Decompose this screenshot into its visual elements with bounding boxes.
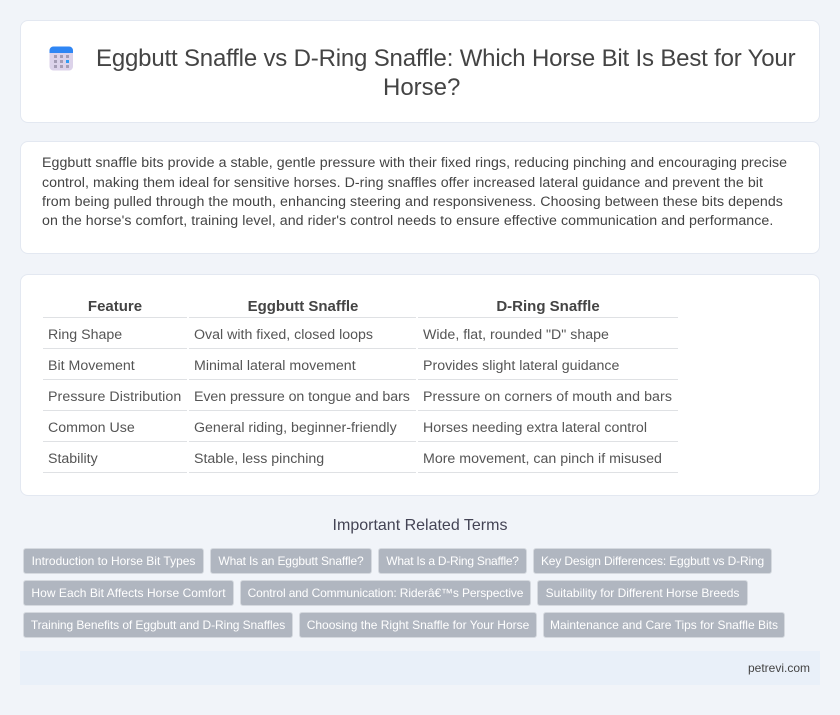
row: bit movement: Provides slight lateral guidance — [423, 358, 619, 374]
row: ring shape: Ring Shape — [48, 327, 122, 343]
tag: Key Design Differences: Eggbutt vs D-Ring — [541, 554, 764, 568]
row: bit movement — [48, 358, 619, 374]
row: ring shape: Wide, flat, rounded "D" shape — [423, 327, 609, 343]
text block: introduction: control, making them ideal for sensitive horses. D-ring snaffles offer increased lateral guidance and prevent the bit — [42, 175, 763, 191]
tag — [537, 580, 748, 606]
row: common use: General riding, beginner-friendly — [194, 420, 397, 436]
tag — [378, 548, 527, 574]
text block: introduction — [42, 155, 787, 229]
tag — [543, 612, 785, 638]
row: pressure distribution — [48, 389, 672, 405]
row: stability: Stable, less pinching — [194, 451, 324, 467]
tag — [240, 580, 531, 606]
tag: Suitability for Different Horse Breeds — [546, 586, 739, 600]
row: bit movement: Bit Movement — [48, 358, 135, 374]
row: pressure distribution: Even pressure on tongue and bars — [194, 389, 410, 405]
text block: introduction: from being pulled through the mouth, enhancing steering and responsiveness. Choosing between these bits depends — [42, 194, 783, 210]
tag: How Each Bit Affects Horse Comfort — [31, 586, 226, 600]
panel: introduction — [20, 141, 820, 254]
row: ring shape — [48, 327, 609, 343]
tag: Maintenance and Care Tips for Snaffle Bits — [550, 618, 778, 632]
text block: introduction: on the horse's comfort, training level, and rider's control needs to ensure effective communication and performance. — [42, 213, 773, 229]
text block: introduction: Eggbutt snaffle bits provide a stable, gentle pressure with their fixed rings, reducing pinching and encouraging precise — [42, 155, 787, 171]
table header row: Eggbutt Snaffle — [248, 298, 358, 315]
title: Eggbutt Snaffle vs D-Ring Snaffle: Which Horse Bit Is Best for Your — [96, 45, 795, 72]
panel: comparison table — [20, 274, 820, 496]
table header row — [88, 298, 600, 315]
row: common use — [48, 420, 647, 436]
row: common use: Horses needing extra lateral control — [423, 420, 647, 436]
tag — [23, 612, 293, 638]
tag: What Is an Eggbutt Snaffle? — [218, 554, 364, 568]
row: stability: More movement, can pinch if misused — [423, 451, 662, 467]
row: pressure distribution: Pressure Distribution — [48, 389, 181, 405]
tag: What Is a D-Ring Snaffle? — [386, 554, 519, 568]
comparison table — [43, 298, 678, 473]
table header row: D-Ring Snaffle — [496, 298, 600, 315]
footer source: petrevi.com — [748, 661, 810, 675]
panel: header — [20, 20, 820, 123]
footer bar — [20, 651, 820, 685]
row: ring shape: Oval with fixed, closed loops — [194, 327, 373, 343]
tag: Introduction to Horse Bit Types — [32, 554, 195, 568]
tag: Training Benefits of Eggbutt and D-Ring Snaffles — [31, 618, 285, 632]
tag — [210, 548, 372, 574]
related terms tags — [23, 548, 785, 638]
tag — [23, 580, 234, 606]
row: stability: Stability — [48, 451, 98, 467]
icon: calendar — [50, 46, 73, 70]
heading: important related terms: Important Related Terms — [333, 517, 507, 534]
row: common use: Common Use — [48, 420, 135, 436]
tag: Control and Communication: Riderâ€™s Perspective — [248, 586, 523, 600]
tag — [23, 548, 204, 574]
row: pressure distribution: Pressure on corners of mouth and bars — [423, 389, 672, 405]
title — [96, 45, 796, 101]
tag: Choosing the Right Snaffle for Your Horse — [307, 618, 529, 632]
table header row: Feature — [88, 298, 142, 315]
row: bit movement: Minimal lateral movement — [194, 358, 356, 374]
tag — [299, 612, 537, 638]
row: stability — [48, 451, 662, 467]
tag — [533, 548, 772, 574]
title: Horse? — [383, 74, 460, 101]
